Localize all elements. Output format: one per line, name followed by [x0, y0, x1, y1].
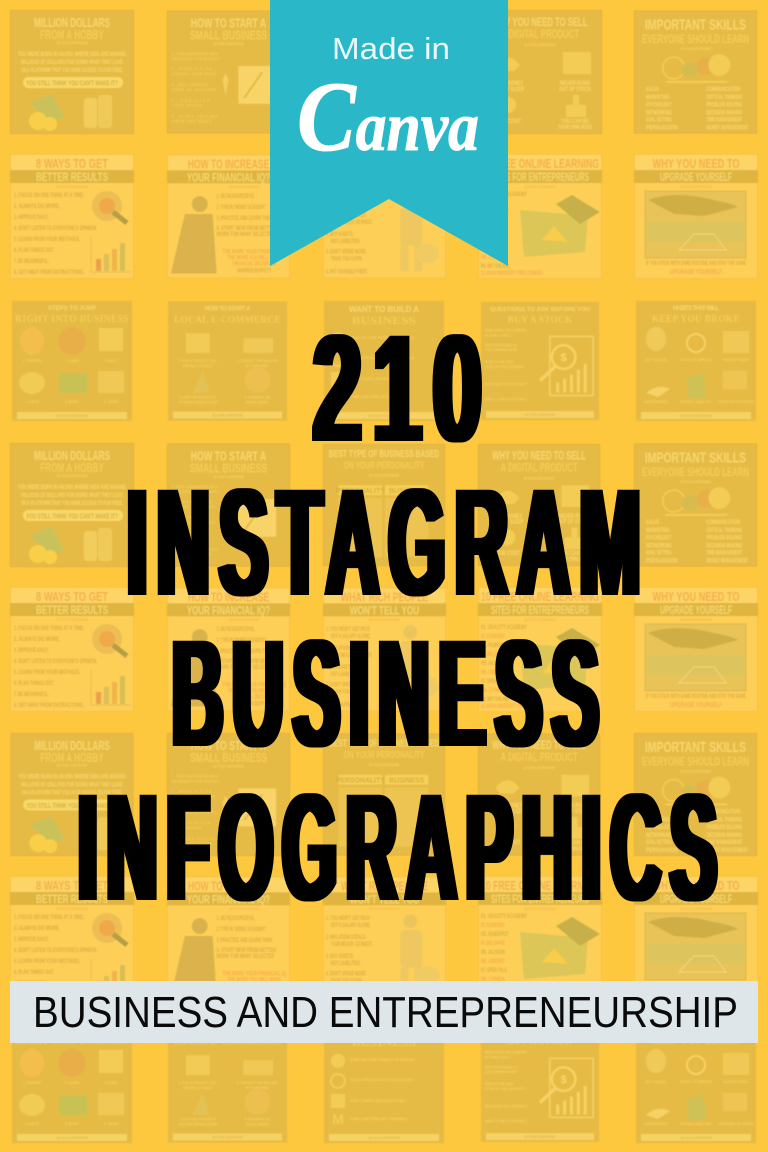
ribbon badge: made in canva — [270, 0, 508, 266]
card: keep you broke, row 8 — [636, 1023, 756, 1143]
ribbon badge: made in canva: Made in — [332, 31, 450, 66]
card: right into business, row 8 — [12, 1023, 132, 1143]
card: want to build a business, row 8 — [324, 1023, 444, 1143]
ribbon badge: made in canva: Canva — [297, 61, 479, 172]
card: digital product, row 4 — [478, 444, 600, 566]
card: learning sites, row 7 — [478, 876, 602, 1000]
card: financial iq, row 5 — [167, 588, 290, 711]
card: best type of business, row 4 — [323, 444, 445, 566]
card: why you need to upgrade yourself, row 2 — [634, 154, 758, 278]
main title: 210 — [313, 303, 493, 474]
card: sell a digital product, row 1 — [478, 10, 602, 134]
card: financial iq, row 7 — [167, 877, 290, 1000]
card: million dollars, row 6 — [11, 733, 133, 856]
card: learning sites, row 5 — [478, 588, 602, 712]
card: small business, row 6 — [167, 733, 290, 856]
card: right into business, row 3 — [12, 301, 132, 421]
card: what rich people won't tell you, row 2 — [323, 155, 446, 278]
card: how to start a small business, row 1 — [167, 11, 290, 133]
card: upgrade yourself, row 7 — [634, 876, 758, 1000]
card: 8 ways to get better results, row 2 — [10, 154, 134, 278]
card: best type of business, row 1 — [323, 11, 445, 133]
card: buy a stock, row 8 — [481, 1024, 599, 1142]
card: best type of business, row 6 — [323, 734, 445, 855]
card: free online learning sites, row 2 — [478, 154, 602, 278]
card: digital product, row 6 — [478, 734, 600, 855]
card: rich people, row 5 — [323, 588, 446, 711]
card: important skills, row 1 — [634, 11, 757, 133]
card: local e-commerce, row 8 — [168, 1024, 287, 1142]
card: million dollars from a hobby, row 1 — [10, 10, 134, 134]
main title — [78, 303, 726, 933]
card: want to build a business, row 3 — [324, 301, 444, 421]
card: 8 ways, row 5 — [10, 588, 134, 712]
card: keep you broke, row 3 — [636, 301, 756, 421]
card: rich people, row 7 — [323, 877, 446, 1000]
card: local e-commerce, row 3 — [168, 302, 287, 420]
card: 8 ways, row 7 — [10, 876, 134, 1000]
card: important skills, row 6 — [634, 733, 757, 856]
card: small business, row 4 — [167, 444, 290, 566]
card: how to increase your financial iq, row 2 — [167, 155, 290, 278]
card: upgrade yourself, row 5 — [634, 588, 758, 712]
card: million dollars, row 4 — [10, 444, 134, 566]
card: buy a stock, row 3 — [481, 302, 599, 420]
card: important skills, row 4 — [634, 444, 757, 566]
